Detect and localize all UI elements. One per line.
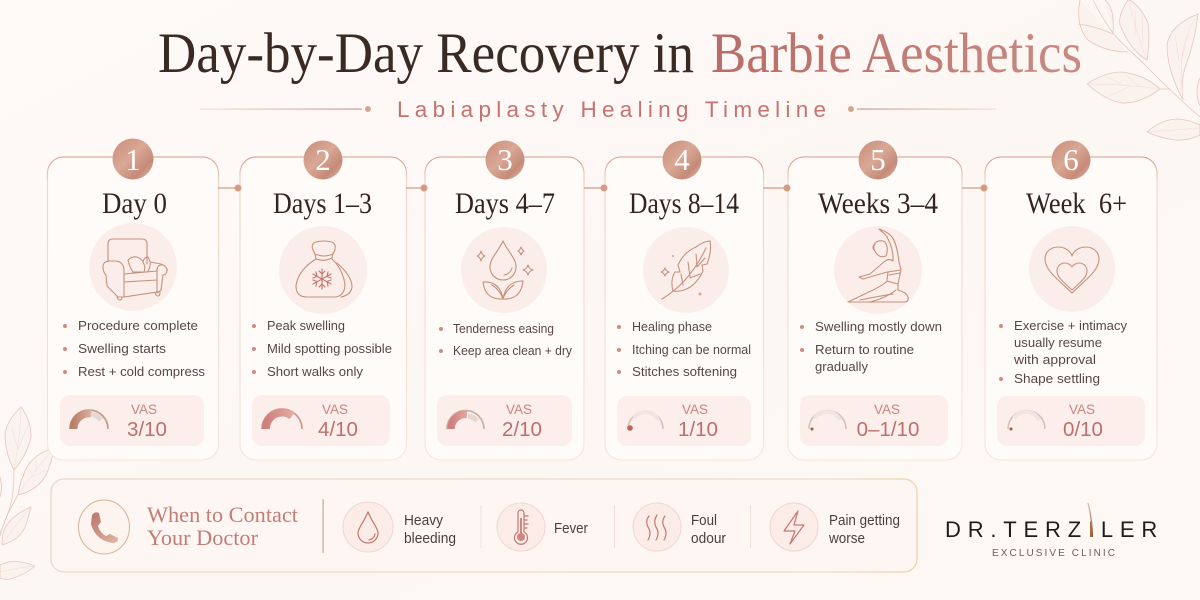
- warning: pain getting worse: [770, 503, 900, 551]
- title: [158, 22, 1082, 85]
- bullet list: Swelling mostly down: [815, 319, 942, 334]
- VAS gauge 0-1/10: VAS: [874, 402, 900, 417]
- warning: heavy bleeding: bleeding: [404, 531, 456, 547]
- bullet list: Itching can be normal: [632, 342, 751, 357]
- icon: yoga figure: [834, 226, 922, 314]
- badge 1: [112, 138, 154, 180]
- bullet list: Short walks only: [267, 364, 363, 379]
- panel: Weeks 3-4: [788, 140, 962, 460]
- bullet list: Exercise + intimacy: [1014, 318, 1127, 333]
- logo: Dr. Terziler Exclusive Clinic: EXCLUSIVE CLINIC: [992, 548, 1115, 559]
- heading: Day 0: Day 0: [102, 187, 167, 220]
- bullet list: [617, 319, 751, 379]
- warning: heavy bleeding: [343, 502, 456, 552]
- panel: Days 8-14: [605, 140, 764, 460]
- badge 5: 5: [870, 142, 886, 177]
- warning: foul odour: odour: [691, 531, 726, 547]
- VAS gauge 1/10: [617, 396, 751, 446]
- VAS gauge 0/10: [997, 396, 1145, 446]
- VAS gauge 3/10: 3/10: [127, 418, 167, 441]
- panel: Day 0: [48, 138, 218, 460]
- heading: when to contact: Your Doctor: [147, 525, 259, 550]
- warning: foul odour: Foul: [691, 513, 717, 529]
- panel: Days 1-3: [240, 140, 406, 460]
- VAS gauge 2/10: VAS: [506, 402, 532, 417]
- warning: pain getting worse: worse: [828, 531, 865, 547]
- heading: Days 4-7: Days 4–7: [455, 187, 555, 220]
- bullet list: gradually: [815, 359, 868, 374]
- bullet list: Mild spotting possible: [267, 341, 392, 356]
- warning: foul odour: [633, 503, 726, 551]
- badge 3: [486, 140, 524, 180]
- heading: Weeks 3-4: Weeks 3–4: [818, 187, 938, 220]
- VAS gauge 3/10: VAS: [131, 402, 157, 417]
- heading: Days 8-14: Days 8–14: [629, 187, 739, 220]
- bullet list: [999, 318, 1127, 386]
- logo: Dr. Terziler Exclusive Clinic: [945, 503, 1164, 559]
- bullet list: usually resume: [1014, 335, 1102, 350]
- VAS gauge 4/10: 4/10: [318, 418, 358, 441]
- heading: when to contact: [147, 502, 298, 550]
- warning: fever: [497, 503, 588, 551]
- bullet list: [252, 318, 392, 379]
- VAS gauge 1/10: VAS: [682, 402, 708, 417]
- bullet list: Procedure complete: [78, 318, 198, 333]
- heading: Week 6+: Week 6+: [1026, 187, 1127, 220]
- VAS gauge 0/10: VAS: [1069, 402, 1095, 417]
- badge 5: [858, 140, 898, 180]
- VAS gauge 4/10: [252, 395, 390, 446]
- badge 6: [1052, 140, 1090, 180]
- bullet list: Swelling starts: [78, 341, 166, 356]
- badge 2: [304, 140, 342, 180]
- timeline connectors: [218, 184, 988, 192]
- warning: fever: Fever: [554, 521, 588, 537]
- bullet list: Shape settling: [1014, 371, 1100, 386]
- bullet list: Tenderness easing: [453, 321, 554, 336]
- badge 4: 4: [674, 142, 690, 177]
- bullet list: Stitches softening: [632, 364, 737, 379]
- badge 1: 1: [125, 142, 141, 177]
- VAS gauge 2/10: 2/10: [502, 418, 542, 441]
- title: Barbie Aesthetics: [711, 22, 1082, 85]
- bullet list: Return to routine: [815, 342, 914, 357]
- bullet list: [800, 319, 942, 374]
- logo: Dr. Terziler Exclusive Clinic: DR.TERZILER: [945, 517, 1164, 542]
- badge 3: 3: [497, 142, 513, 177]
- bullet list: Peak swelling: [267, 318, 345, 333]
- badge 2: 2: [315, 142, 331, 177]
- panel: Week 6+: [985, 140, 1157, 460]
- VAS gauge 0-1/10: [800, 395, 948, 446]
- subtitle with ornament lines: [200, 97, 996, 122]
- icon: feather: [643, 227, 729, 313]
- bullet list: Keep area clean + dry: [453, 343, 572, 358]
- decorative leaves top right: [1078, 0, 1200, 140]
- heading: Days 1-3: Days 1–3: [273, 187, 372, 220]
- VAS gauge 0-1/10: 0–1/10: [857, 418, 919, 441]
- bullet list: Healing phase: [632, 319, 712, 334]
- bullet list: Rest + cold compress: [78, 364, 205, 379]
- icon: cold compress bag: [279, 226, 367, 314]
- VAS gauge 4/10: VAS: [322, 402, 348, 417]
- warning: heavy bleeding: Heavy: [404, 513, 444, 529]
- bullet list: with approval: [1013, 352, 1096, 367]
- decorative leaves bottom left: [0, 407, 54, 579]
- panel: Days 4-7: [425, 140, 584, 460]
- badge 4: [662, 140, 702, 180]
- icon: water drop with leaves: [461, 227, 547, 313]
- subtitle with ornament lines: Labiaplasty Healing Timeline: [397, 97, 826, 122]
- bullet list: [439, 321, 572, 358]
- warning: pain getting worse: Pain getting: [829, 513, 900, 529]
- VAS gauge 2/10: [437, 395, 572, 446]
- VAS gauge 0/10: 0/10: [1063, 418, 1103, 441]
- VAS gauge 1/10: 1/10: [678, 418, 718, 441]
- VAS gauge 3/10: [60, 395, 204, 446]
- heading: when to contact: When to Contact: [147, 502, 298, 527]
- panel: when to contact your doctor: [51, 479, 917, 572]
- icon: phone: [78, 500, 130, 554]
- title: Day-by-Day Recovery in: [158, 22, 694, 85]
- bullet list: [63, 318, 205, 379]
- badge 6: 6: [1063, 142, 1079, 177]
- icon: armchair: [89, 223, 177, 311]
- icon: two hearts: [1029, 226, 1115, 312]
